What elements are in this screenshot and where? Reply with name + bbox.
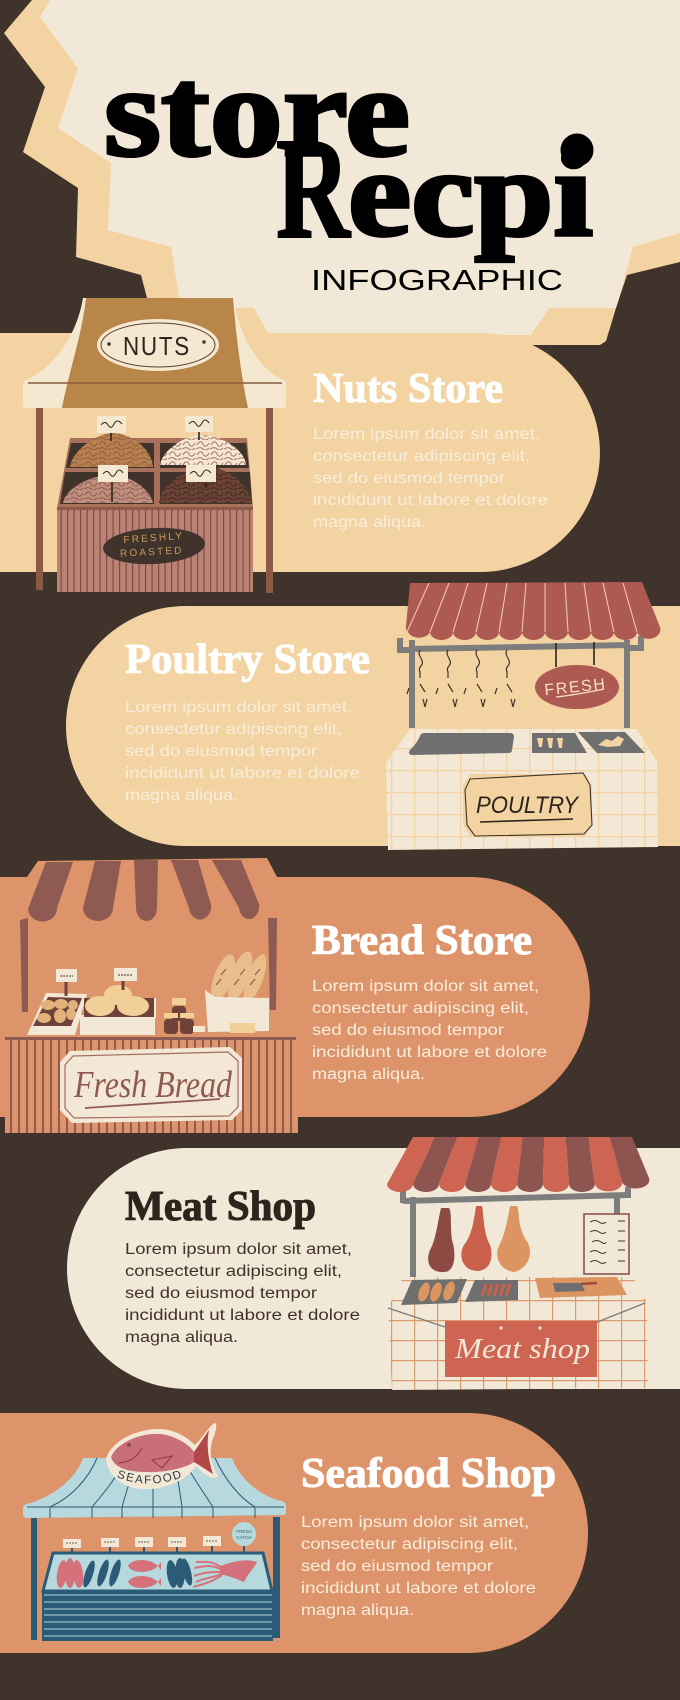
body text: consectetur adipiscing elit, <box>125 721 342 738</box>
body text: consectetur adipiscing elit, <box>125 1263 342 1280</box>
body text: incididunt ut labore et dolore <box>312 1044 547 1061</box>
display case <box>43 1553 272 1591</box>
fresh bread sign: Fresh Bread <box>73 1064 233 1106</box>
panel: seafood band <box>0 1413 588 1653</box>
counter <box>386 729 658 850</box>
front panel <box>5 1038 298 1133</box>
nut labels <box>97 416 216 502</box>
body text: sed do eiusmod tempor <box>125 1285 317 1302</box>
nut pile 1 <box>70 433 153 467</box>
poultry sign: POULTRY <box>476 792 580 819</box>
title letter: R: R <box>276 109 351 269</box>
header burst: cream layer <box>40 0 680 335</box>
poultry sign <box>463 773 592 836</box>
heading: Nuts Store <box>313 366 503 412</box>
title i dot <box>561 134 593 166</box>
crate of rolls <box>27 993 87 1035</box>
fresh catch badge: CATCH <box>236 1535 252 1540</box>
fish sign: SEAFOOD <box>118 1470 180 1484</box>
body text: Lorem ipsum dolor sit amet, <box>301 1514 529 1531</box>
poultry store text <box>125 637 370 804</box>
gray frame <box>403 1187 628 1277</box>
bread price tags <box>230 1023 255 1033</box>
hooks and hanging chickens <box>407 650 515 707</box>
body text <box>313 426 548 531</box>
meat shop text <box>125 1184 360 1346</box>
ham 2 <box>461 1206 492 1271</box>
body text: Lorem ipsum dolor sit amet, <box>125 1241 352 1258</box>
freshly roasted sign: FRESHLY <box>123 531 185 546</box>
body text: Lorem ipsum dolor sit amet, <box>313 426 540 443</box>
counter lip <box>57 507 253 510</box>
awning stripes <box>28 860 259 922</box>
illustration: bread stall <box>5 858 298 1133</box>
awning stripes <box>387 1137 649 1192</box>
body text: sed do eiusmod tempor <box>312 1022 504 1039</box>
baguettes <box>206 948 271 1005</box>
nuts oval sign: NUTS <box>123 331 191 361</box>
nut pile 4 <box>159 467 252 503</box>
steak cuts <box>482 1284 510 1296</box>
fresh sign: FRESH <box>544 676 607 699</box>
body text: magna aliqua. <box>301 1602 414 1619</box>
fresh catch badge <box>232 1522 256 1546</box>
blue fish pile <box>165 1557 194 1589</box>
panel: poultry band <box>66 606 680 846</box>
fresh catch badge: FRESH <box>236 1529 252 1534</box>
illustration: seafood stall <box>23 1423 286 1641</box>
awning line <box>28 382 282 384</box>
compartments <box>60 443 252 504</box>
panel: nuts band <box>0 333 600 572</box>
nut pile 2 <box>160 435 246 465</box>
body text: sed do eiusmod tempor <box>301 1558 493 1575</box>
body text: magna aliqua. <box>125 1329 238 1346</box>
body text: consectetur adipiscing elit, <box>313 448 530 465</box>
roof lines <box>27 1458 284 1518</box>
fish sign <box>106 1423 218 1490</box>
body text: magna aliqua. <box>313 514 426 531</box>
trays <box>401 1279 518 1305</box>
heading: Seafood Shop <box>301 1451 556 1497</box>
basket <box>205 990 269 1032</box>
fish labels <box>63 1536 244 1553</box>
body text <box>301 1514 536 1619</box>
heading: Bread Store <box>312 918 532 964</box>
flat pink fish <box>128 1560 161 1588</box>
cutting board and cleaver <box>535 1277 627 1298</box>
nut pile 3 <box>63 475 153 503</box>
poles <box>36 405 273 593</box>
bread labels <box>56 968 137 996</box>
counter lines <box>44 1595 272 1636</box>
body text: sed do eiusmod tempor <box>125 743 317 760</box>
squid <box>193 1560 257 1587</box>
body text: consectetur adipiscing elit, <box>301 1536 518 1553</box>
panel: meat band <box>67 1148 680 1389</box>
poles <box>20 918 277 1012</box>
body text: magna aliqua. <box>312 1066 425 1083</box>
body text <box>312 978 547 1083</box>
pink fish group <box>55 1558 84 1589</box>
freshly roasted sign <box>102 525 206 567</box>
heading: Meat Shop <box>125 1184 316 1230</box>
ham 3 <box>497 1206 530 1272</box>
awning <box>406 582 660 640</box>
counter edge <box>5 1037 296 1040</box>
blue fish group <box>81 1558 123 1589</box>
sausages <box>416 1280 457 1303</box>
nuts oval sign <box>97 319 219 371</box>
bread store text <box>312 918 547 1083</box>
freshly roasted sign: ROASTED <box>120 545 184 560</box>
body text: incididunt ut labore et dolore <box>125 765 360 782</box>
body text: incididunt ut labore et dolore <box>301 1580 536 1597</box>
menu board <box>584 1214 629 1274</box>
heading: Poultry Store <box>125 637 370 683</box>
panel: bread band <box>0 877 590 1117</box>
counter base <box>42 1592 273 1641</box>
jar price tag <box>193 1026 205 1032</box>
title word: ecpi: ecpi <box>348 125 593 262</box>
chicken pieces <box>537 736 624 748</box>
meat shop sign <box>388 1303 645 1377</box>
body text <box>125 1241 360 1346</box>
illustration: meat stall <box>387 1137 649 1390</box>
crate of buns <box>80 985 156 1035</box>
body text: consectetur adipiscing elit, <box>312 1000 529 1017</box>
seafood shop text <box>301 1451 556 1619</box>
header burst: tan layer <box>4 0 680 345</box>
body text: Lorem ipsum dolor sit amet, <box>312 978 539 995</box>
counter <box>388 1277 648 1390</box>
nuts store text <box>313 366 548 531</box>
body text: sed do eiusmod tempor <box>313 470 505 487</box>
ham 1 <box>428 1208 454 1272</box>
fresh sign <box>535 642 619 709</box>
subtitle: INFOGRAPHIC <box>311 265 563 297</box>
header burst: tan notch <box>236 308 269 335</box>
front stripes <box>57 508 253 592</box>
illustration: poultry stall <box>386 582 660 850</box>
body text <box>125 699 360 804</box>
counter top <box>57 438 253 508</box>
jars <box>164 998 194 1034</box>
body text: incididunt ut labore et dolore <box>125 1307 360 1324</box>
body text: incididunt ut labore et dolore <box>313 492 548 509</box>
meat shop sign: Meat shop <box>454 1333 590 1365</box>
awning brown <box>62 298 248 408</box>
poles <box>31 1517 280 1640</box>
illustration: nuts stall <box>23 298 286 593</box>
body text: Lorem ipsum dolor sit amet, <box>125 699 352 716</box>
gray frame <box>400 636 641 728</box>
awning top <box>27 858 277 877</box>
body text: magna aliqua. <box>125 787 238 804</box>
awning cream <box>23 298 286 408</box>
awning ribs <box>407 583 637 632</box>
roof <box>23 1458 286 1518</box>
trays <box>409 732 645 755</box>
title word: store: store <box>104 41 410 183</box>
title <box>104 41 593 269</box>
fresh bread sign <box>60 1047 242 1123</box>
